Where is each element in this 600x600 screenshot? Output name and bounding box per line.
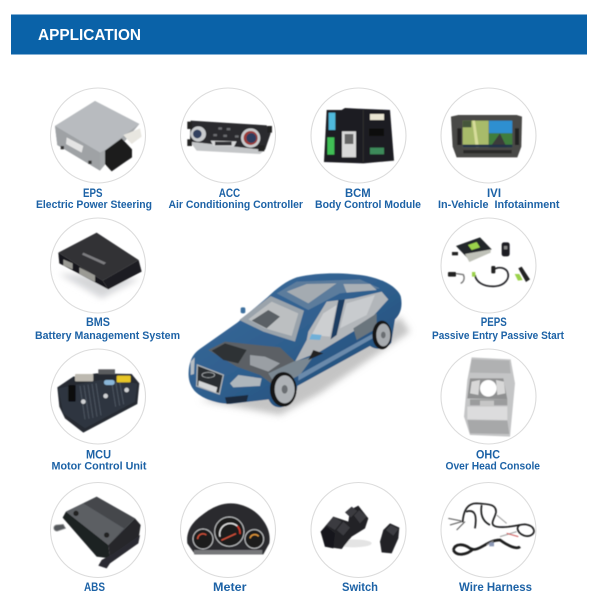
label: Body Control Module: Body Control Module bbox=[315, 199, 421, 211]
door sill stripe bbox=[298, 332, 377, 381]
label: In-Vehicle Infotainment: In-Vehicle Infotainment bbox=[438, 199, 560, 211]
label: IVI: IVI bbox=[487, 186, 501, 200]
icon: instrument cluster bbox=[187, 503, 270, 554]
icon: in-vehicle infotainment unit bbox=[451, 115, 522, 157]
side windows and cabin bbox=[295, 292, 388, 362]
label: Motor Control Unit: Motor Control Unit bbox=[52, 461, 147, 473]
panel: ACC bbox=[168, 88, 304, 211]
label: ABS: ABS bbox=[84, 580, 105, 594]
icon: overhead console bbox=[464, 357, 515, 437]
panel: EPS bbox=[36, 88, 152, 211]
label: Passive Entry Passive Start: Passive Entry Passive Start bbox=[432, 330, 564, 342]
icon: battery management box bbox=[58, 233, 142, 298]
grille and badge bbox=[197, 365, 223, 394]
panel: IVI bbox=[438, 88, 560, 211]
panel: BMS bbox=[35, 218, 180, 342]
label: Switch: Switch bbox=[342, 580, 378, 594]
label: MCU: MCU bbox=[86, 448, 111, 462]
label: Battery Management System: Battery Management System bbox=[35, 330, 180, 342]
label: EPS: EPS bbox=[83, 186, 102, 200]
panel: Wire Harness bbox=[441, 482, 536, 594]
icon: window switches bbox=[321, 506, 399, 553]
panel: Switch bbox=[311, 482, 406, 594]
front wheel bbox=[270, 372, 297, 407]
panel: OHC bbox=[441, 349, 540, 473]
label: Electric Power Steering: Electric Power Steering bbox=[36, 199, 152, 211]
label: Over Head Console: Over Head Console bbox=[446, 461, 540, 473]
icon: EPS control box bbox=[55, 101, 142, 171]
panel: MCU bbox=[50, 349, 147, 473]
label: Meter: Meter bbox=[213, 580, 247, 594]
windshield and interior bbox=[239, 296, 304, 342]
ground shadow bbox=[200, 317, 410, 415]
panel: BCM bbox=[311, 88, 421, 211]
label: Air Conditioning Controller: Air Conditioning Controller bbox=[168, 199, 304, 211]
icon: motor control unit bbox=[57, 369, 139, 433]
label: OHC: OHC bbox=[476, 448, 500, 462]
rear wheel bbox=[372, 321, 392, 349]
icon: air conditioning panel bbox=[187, 121, 272, 154]
heading: APPLICATION: APPLICATION bbox=[38, 27, 141, 44]
label: BMS: BMS bbox=[86, 315, 110, 329]
label: BCM: BCM bbox=[345, 186, 371, 200]
panel: PEPS bbox=[432, 218, 564, 342]
headlight bbox=[230, 375, 262, 387]
label: ACC: ACC bbox=[219, 186, 240, 200]
icon: wire harness bbox=[448, 503, 534, 554]
engine bay bbox=[208, 342, 295, 385]
icon: passive entry kit bbox=[448, 237, 530, 286]
icon: body control module bbox=[324, 108, 394, 163]
panel: ABS bbox=[50, 482, 146, 594]
label: Wire Harness: Wire Harness bbox=[459, 580, 532, 594]
icon: ABS module bbox=[54, 497, 141, 568]
car illustration bbox=[189, 273, 410, 415]
header banner bbox=[11, 14, 587, 54]
panel: Meter bbox=[180, 482, 276, 594]
label: PEPS: PEPS bbox=[481, 315, 507, 329]
car body bbox=[189, 273, 402, 407]
